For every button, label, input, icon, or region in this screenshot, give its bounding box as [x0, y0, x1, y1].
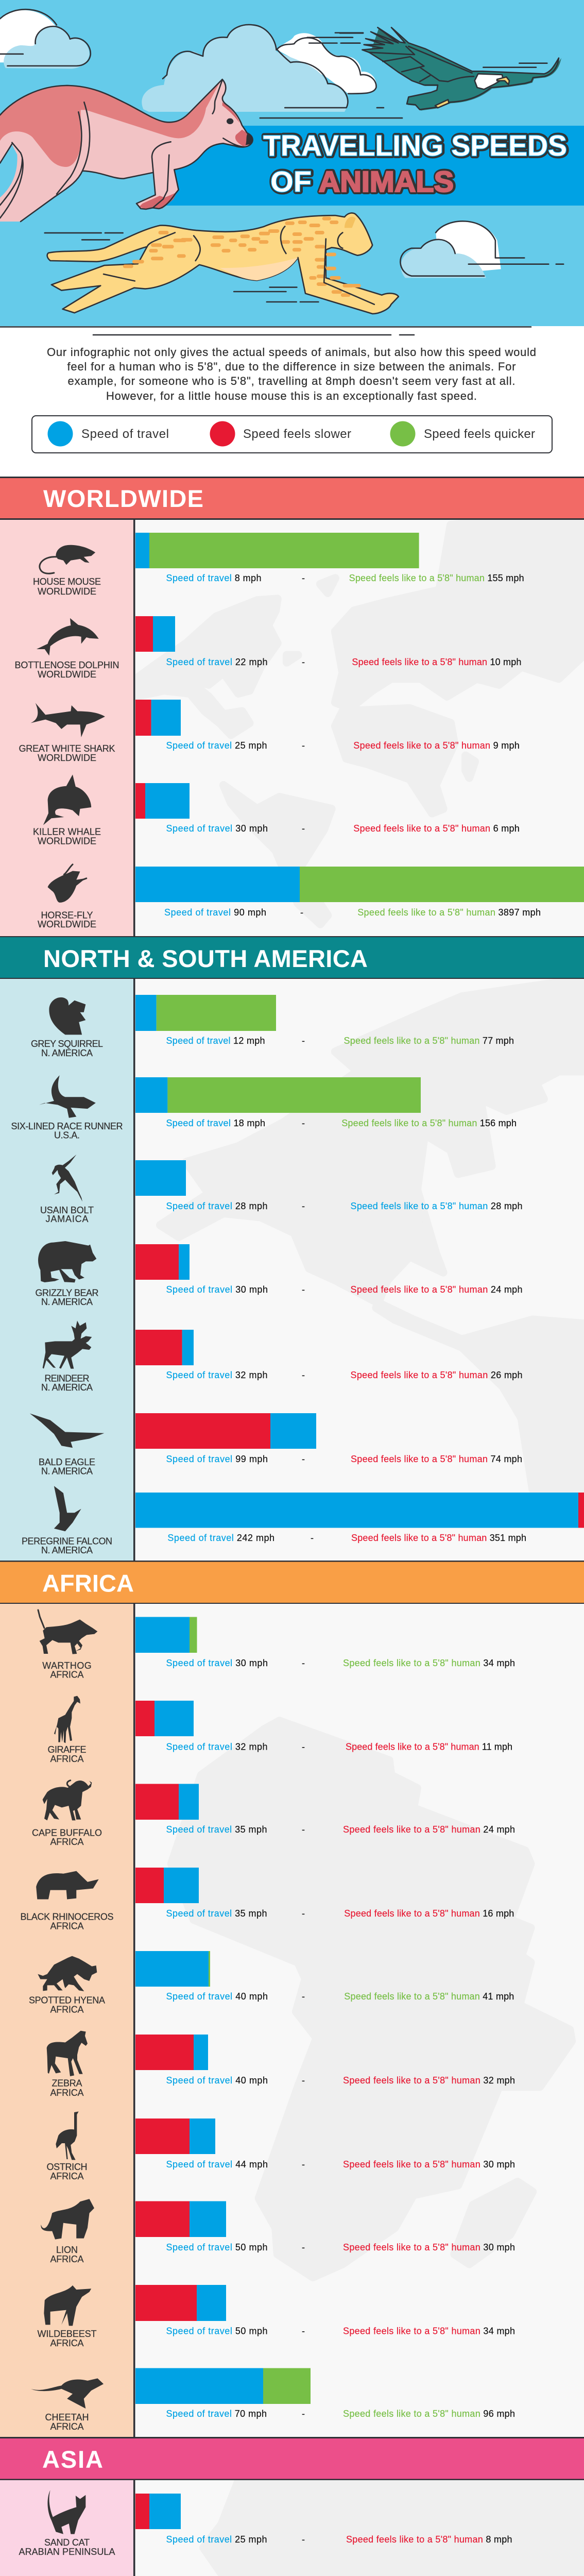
label: PEREGRINE FALCON: [22, 1536, 112, 1547]
speeds: -: [302, 2159, 305, 2170]
label: N. AMERICA: [41, 1466, 93, 1477]
icon: cheetah: [31, 2378, 104, 2409]
speeds: -: [302, 1824, 305, 1835]
label: KILLER WHALE: [33, 826, 101, 837]
speeds: [166, 1118, 517, 1128]
legend: speed feels quicker: Speed feels quicker: [424, 427, 535, 441]
speeds: Speed feels like to a 5'8" human 30 mph: [343, 2159, 515, 2170]
label: [38, 910, 96, 929]
label: [19, 2537, 115, 2557]
speeds: [166, 657, 521, 667]
north and south america heading: NORTH & SOUTH AMERICA: [43, 945, 368, 972]
label: [40, 1205, 94, 1224]
label: [45, 2412, 89, 2432]
row: house mouse: [33, 533, 524, 597]
label: AFRICA: [50, 1669, 83, 1680]
label: AFRICA: [50, 1921, 83, 1931]
intro paragraph: [47, 346, 536, 402]
speeds: -: [302, 1201, 305, 1211]
icon: shark: [30, 703, 105, 737]
bar: [135, 1160, 186, 1196]
speeds: [166, 2326, 515, 2336]
africa heading: AFRICA: [42, 1569, 134, 1597]
sidebar: [0, 1604, 135, 2437]
speeds: -: [302, 657, 305, 667]
sidebar: [0, 520, 135, 936]
subtitle fill layer: OF ANIMALS: [270, 165, 454, 198]
section: worldwide: [0, 477, 584, 936]
speeds: [166, 2159, 515, 2170]
label: [33, 577, 101, 597]
speeds: -: [302, 1741, 305, 1752]
speeds: -: [300, 907, 303, 918]
icon: sprinter: [52, 1155, 82, 1201]
sidebar: [0, 2480, 135, 2576]
label: [50, 2245, 83, 2264]
label: REINDEER: [44, 1374, 90, 1384]
legend: speed feels slower: [210, 421, 351, 446]
bar: [135, 1244, 190, 1280]
speeds: Speed of travel 32 mph: [166, 1370, 268, 1380]
intro paragraph: example, for someone who is 5'8", travelling at 8mph doesn't seem very fast at all.: [68, 375, 515, 387]
row: grey squirrel: [31, 995, 514, 1058]
speeds: Speed of travel 99 mph: [166, 1454, 268, 1464]
label: CAPE BUFFALO: [32, 1828, 102, 1838]
panel background: [135, 979, 584, 1561]
speeds: Speed feels like to a 5'8" human 6 mph: [353, 823, 520, 834]
icon: hyena: [38, 1956, 97, 1991]
title outline layer: TRAVELLING SPEEDS: [264, 129, 568, 162]
row: usain bolt: [40, 1155, 522, 1224]
label: LION: [56, 2245, 78, 2255]
label: GRIZZLY BEAR: [35, 1288, 99, 1298]
map: americas: [160, 981, 584, 1489]
icon: lizard: [39, 1075, 96, 1118]
speeds: Speed feels like to a 5'8" human 41 mph: [344, 1991, 514, 2002]
speeds: -: [302, 740, 305, 751]
title: [263, 129, 568, 198]
section: africa: [0, 1561, 584, 2437]
title band: [154, 126, 584, 206]
speeds: Speed of travel 30 mph: [166, 1284, 268, 1295]
label: BOTTLENOSE DOLPHIN: [14, 660, 119, 670]
eagle: [340, 27, 561, 111]
row: killer whale: [33, 774, 520, 846]
bar: [135, 2285, 226, 2321]
row: great white shark: [19, 700, 520, 763]
label: [22, 1536, 112, 1555]
speeds: Speed feels like to a 5'8" human 9 mph: [353, 740, 520, 751]
label: [46, 2162, 88, 2181]
row: lion: [41, 2199, 515, 2264]
label: AFRICA: [50, 2171, 83, 2181]
worldwide heading: [0, 477, 584, 520]
speeds: -: [302, 1908, 305, 1919]
speeds: Speed of travel 32 mph: [166, 1741, 268, 1752]
row: reindeer: [41, 1320, 522, 1393]
bar: [135, 1413, 316, 1449]
speeds: -: [302, 2242, 305, 2252]
speeds: [166, 740, 520, 751]
bar: [135, 1493, 584, 1528]
speeds: Speed of travel 22 mph: [166, 657, 268, 667]
subtitle outline layer: OF ANIMALS: [271, 165, 454, 198]
section: north and south america: [0, 936, 584, 1561]
worldwide heading: WORLDWIDE: [43, 485, 203, 512]
row: peregrine falcon: [22, 1486, 584, 1555]
section: asia: [0, 2437, 584, 2576]
speeds: Speed of travel 30 mph: [166, 823, 268, 834]
label: [37, 2329, 97, 2348]
icon: squirrel: [49, 997, 85, 1035]
speeds: Speed of travel 242 mph: [167, 1533, 274, 1543]
speeds: Speed of travel 50 mph: [166, 2326, 268, 2336]
row: giraffe: [47, 1696, 512, 1764]
speeds: [166, 1036, 514, 1046]
speeds: -: [302, 1036, 305, 1046]
asia heading: [0, 2437, 584, 2480]
icon: ostrich: [56, 2111, 79, 2160]
speeds: [166, 1370, 522, 1380]
speeds: [166, 1991, 514, 2002]
map: africa: [171, 1721, 572, 2277]
label: [32, 1828, 102, 1847]
intro paragraph: Our infographic not only gives the actual speeds of animals, but also how this speed would: [47, 346, 536, 359]
icon: zebra: [47, 2031, 88, 2076]
speeds: Speed of travel 40 mph: [166, 1991, 268, 2002]
row: ostrich: [46, 2111, 515, 2181]
label: [41, 1374, 93, 1393]
icon: mouse: [40, 545, 95, 573]
sky background: [0, 0, 584, 326]
bar: [135, 995, 276, 1031]
row: wildebeest: [37, 2285, 515, 2348]
speeds: -: [302, 1658, 305, 1668]
speeds: Speed of travel 18 mph: [166, 1118, 265, 1128]
label: AFRICA: [50, 2338, 83, 2348]
icon: giraffe: [54, 1696, 80, 1743]
speeds: Speed feels like to a 5'8" human 30 mph: [343, 2242, 515, 2252]
speeds: Speed feels like to a 5'8" human 351 mph: [351, 1533, 526, 1543]
speeds: [166, 823, 520, 834]
cheetah: [45, 213, 399, 314]
label: ZEBRA: [51, 2078, 82, 2089]
label: N. AMERICA: [41, 1545, 93, 1555]
bar: [135, 1868, 199, 1903]
speeds: [167, 1533, 526, 1543]
speeds: [166, 1824, 515, 1835]
speeds: [166, 573, 524, 583]
label: [39, 1457, 95, 1477]
speeds: -: [302, 2326, 305, 2336]
speeds: -: [302, 2534, 305, 2545]
panel background: [135, 520, 584, 936]
world map: [136, 519, 584, 924]
label: CHEETAH: [45, 2412, 89, 2422]
speeds: Speed feels like to a 5'8" human 24 mph: [350, 1284, 522, 1295]
icon: dolphin: [37, 618, 99, 656]
label: N. AMERICA: [41, 1048, 93, 1058]
hero illustration: [0, 0, 584, 335]
speeds: Speed of travel 30 mph: [166, 1658, 268, 1668]
label: U.S.A.: [54, 1130, 80, 1141]
label: GREY SQUIRREL: [31, 1039, 103, 1049]
label: N. AMERICA: [41, 1382, 93, 1393]
bar: [135, 867, 584, 902]
bar: [135, 2119, 215, 2154]
speeds: Speed feels like to a 5'8" human 34 mph: [343, 2326, 515, 2336]
label: [33, 826, 101, 846]
legend: [32, 416, 552, 453]
row: bottlenose dolphin: [14, 616, 521, 680]
speeds: Speed feels like to a 5'8" human 34 mph: [343, 1658, 515, 1668]
row: cheetah: [31, 2368, 515, 2432]
cloud: lower right: [400, 221, 563, 278]
speeds: -: [311, 1533, 314, 1543]
row: sand cat: [19, 2490, 512, 2557]
icon: fly: [48, 865, 87, 903]
legend: speed feels slower: Speed feels slower: [243, 427, 351, 441]
bar: [135, 2494, 181, 2529]
speeds: -: [302, 1284, 305, 1295]
label: GREAT WHITE SHARK: [19, 743, 115, 754]
label: WILDEBEEST: [37, 2329, 97, 2339]
bar: [135, 533, 419, 568]
bar: [135, 1077, 421, 1113]
label: [14, 660, 119, 680]
label: [11, 1121, 123, 1141]
label: SAND CAT: [44, 2537, 90, 2548]
speeds: -: [302, 573, 305, 583]
label: AFRICA: [50, 2421, 83, 2432]
speeds: -: [302, 1454, 305, 1464]
label: SIX-LINED RACE RUNNER: [11, 1121, 123, 1131]
label: WORLDWIDE: [38, 836, 96, 846]
label: WORLDWIDE: [38, 919, 96, 929]
label: AFRICA: [50, 1837, 83, 1847]
speeds: [164, 907, 541, 918]
speeds: [166, 2534, 512, 2545]
title fill layer: TRAVELLING SPEEDS: [263, 129, 567, 162]
legend: speed of travel: [47, 421, 169, 446]
label: HOUSE MOUSE: [33, 577, 101, 587]
bar: [135, 783, 190, 819]
speeds: -: [302, 2409, 305, 2419]
speeds: [166, 1454, 522, 1464]
intro paragraph: However, for a little house mouse this is an exceptionally fast speed.: [106, 389, 477, 402]
icon: rhino: [36, 1871, 99, 1900]
bar: [135, 2035, 208, 2070]
icon: sand cat: [47, 2490, 85, 2534]
bar: [135, 700, 181, 736]
speeds: Speed of travel 12 mph: [166, 1036, 265, 1046]
row: spotted hyena: [29, 1951, 514, 2014]
speeds: [166, 1908, 514, 1919]
speeds: Speed of travel 28 mph: [166, 1201, 268, 1211]
icon: orca: [43, 774, 91, 825]
speeds: Speed feels like to a 5'8" human 11 mph: [346, 1741, 512, 1752]
label: WORLDWIDE: [38, 586, 96, 597]
label: [29, 1995, 105, 2014]
label: WORLDWIDE: [38, 753, 96, 763]
row: zebra: [47, 2031, 515, 2098]
speeds: -: [302, 823, 305, 834]
row: six-lined race runner: [11, 1075, 517, 1141]
label: AFRICA: [50, 2004, 83, 2014]
speeds: Speed feels like to a 5'8" human 10 mph: [352, 657, 521, 667]
speeds: Speed of travel 35 mph: [166, 1824, 267, 1835]
bar: [135, 1951, 210, 1987]
speeds: Speed of travel 25 mph: [166, 2534, 267, 2545]
icon: eagle: [30, 1414, 104, 1448]
speeds: [166, 2075, 515, 2086]
speeds: Speed feels like to a 5'8" human 156 mph: [341, 1118, 517, 1128]
speeds: [166, 1201, 522, 1211]
hero baseline rules: [0, 327, 531, 335]
intro paragraph: feel for a human who is 5'8", due to the difference in size between the animals. For: [67, 360, 516, 373]
label: JAMAICA: [45, 1214, 89, 1224]
label: BLACK RHINOCEROS: [21, 1911, 113, 1922]
label: GIRAFFE: [47, 1744, 87, 1755]
label: [42, 1660, 92, 1680]
cloud: centre: [142, 25, 402, 118]
bar: [135, 2201, 226, 2237]
north and south america heading: [0, 936, 584, 979]
speeds: [166, 2242, 515, 2252]
icon: wildebeest: [44, 2285, 91, 2326]
label: WORLDWIDE: [38, 669, 96, 680]
label: AFRICA: [50, 2254, 83, 2264]
label: [31, 1039, 103, 1058]
label: [19, 743, 115, 763]
row: grizzly bear: [35, 1241, 522, 1307]
speeds: Speed feels like to a 5'8" human 26 mph: [350, 1370, 522, 1380]
speeds: -: [302, 1370, 305, 1380]
icon: grizzly: [38, 1241, 96, 1282]
bar: [135, 1330, 194, 1365]
africa heading: [0, 1561, 584, 1604]
speeds: -: [302, 2075, 305, 2086]
icon: reindeer: [43, 1320, 92, 1369]
row: bald eagle: [30, 1413, 522, 1477]
speeds: Speed of travel 35 mph: [166, 1908, 267, 1919]
label: ARABIAN PENINSULA: [19, 2547, 115, 2557]
map: asia: [203, 2481, 584, 2576]
panel background: [135, 1604, 584, 2437]
icon: lion: [41, 2199, 94, 2240]
label: AFRICA: [50, 2088, 83, 2098]
speeds: -: [302, 1991, 305, 2002]
icon: buffalo: [43, 1781, 92, 1820]
legend: speed of travel: Speed of travel: [81, 427, 169, 441]
speeds: Speed feels like to a 5'8" human 155 mph: [349, 573, 524, 583]
label: OSTRICH: [46, 2162, 88, 2172]
speeds: Speed feels like to a 5'8" human 96 mph: [343, 2409, 515, 2419]
label: HORSE-FLY: [41, 910, 93, 920]
label: BALD EAGLE: [39, 1457, 95, 1467]
label: [35, 1288, 99, 1307]
speeds: Speed feels like to a 5'8" human 74 mph: [351, 1454, 522, 1464]
speeds: [166, 1658, 515, 1668]
speeds: Speed feels like to a 5'8" human 16 mph: [344, 1908, 514, 1919]
asia heading: ASIA: [42, 2446, 103, 2473]
row: warthog: [38, 1610, 515, 1680]
icon: warthog: [38, 1610, 97, 1654]
kangaroo: [0, 79, 253, 222]
bar: [135, 1617, 197, 1653]
speeds: Speed feels like to a 5'8" human 32 mph: [343, 2075, 515, 2086]
speeds: Speed of travel 90 mph: [164, 907, 266, 918]
panel background: [135, 2480, 584, 2576]
speeds: [166, 2409, 515, 2419]
speeds: -: [302, 1118, 305, 1128]
speeds: Speed of travel 25 mph: [166, 740, 267, 751]
sidebar: [0, 979, 135, 1561]
speeds: Speed of travel 8 mph: [166, 573, 262, 583]
icon: falcon: [54, 1486, 81, 1531]
speeds: Speed feels like to a 5'8" human 28 mph: [350, 1201, 522, 1211]
label: WARTHOG: [42, 1660, 92, 1671]
speeds: Speed feels like to a 5'8" human 3897 mph: [357, 907, 541, 918]
speeds: Speed of travel 50 mph: [166, 2242, 268, 2252]
label: SPOTTED HYENA: [29, 1995, 105, 2005]
speeds: Speed of travel 44 mph: [166, 2159, 268, 2170]
speeds: Speed feels like to a 5'8" human 24 mph: [343, 1824, 515, 1835]
legend: speed feels quicker: [390, 421, 535, 446]
bar: [135, 2368, 311, 2404]
label: [47, 1744, 87, 1764]
label: [50, 2078, 83, 2098]
label: N. AMERICA: [41, 1297, 93, 1307]
label: [21, 1911, 113, 1931]
bar: [135, 616, 175, 652]
row: black rhinoceros: [21, 1868, 514, 1931]
speeds: Speed feels like to a 5'8" human 8 mph: [346, 2534, 512, 2545]
bar: [135, 1701, 194, 1736]
row: cape buffalo: [32, 1781, 515, 1847]
label: USAIN BOLT: [40, 1205, 94, 1215]
row: horse-fly: [38, 865, 584, 929]
label: AFRICA: [50, 1754, 83, 1764]
speeds: [166, 1741, 512, 1752]
speeds: Speed of travel 70 mph: [166, 2409, 267, 2419]
cloud: top left: [0, 9, 91, 69]
speeds: [166, 1284, 522, 1295]
speeds: Speed of travel 40 mph: [166, 2075, 268, 2086]
speeds: Speed feels like to a 5'8" human 77 mph: [344, 1036, 514, 1046]
bar: [135, 1784, 199, 1820]
